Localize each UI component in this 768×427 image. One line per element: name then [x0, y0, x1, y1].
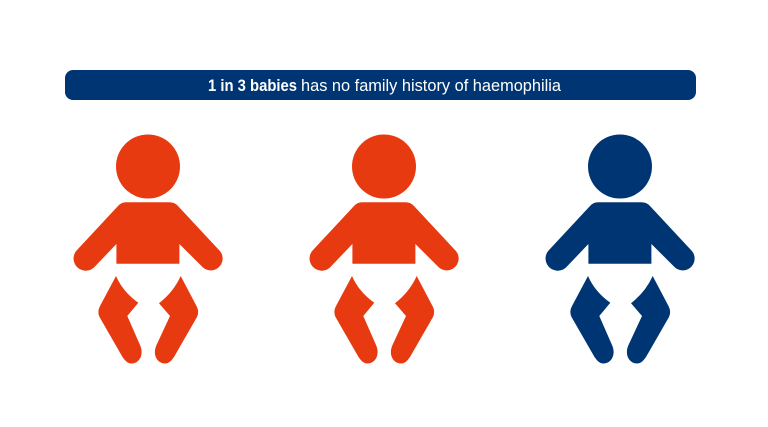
title banner: has no family history of haemophilia [301, 77, 562, 95]
title banner: 1 in 3 babies [208, 77, 297, 95]
icon: navy baby [546, 134, 695, 364]
title banner [65, 70, 696, 100]
icon: orange baby 1 [74, 134, 223, 364]
icon: orange baby 2 [310, 134, 459, 364]
